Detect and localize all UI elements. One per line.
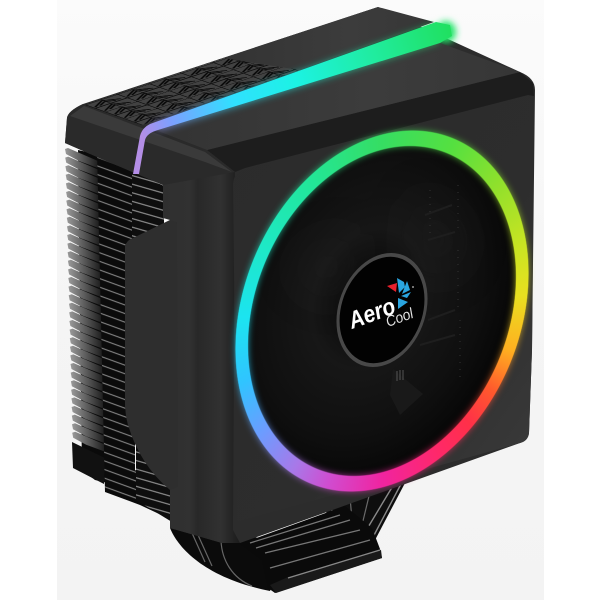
green light bar end glow — [436, 21, 456, 43]
fan frame details — [390, 185, 460, 415]
left top bevel — [65, 104, 235, 185]
front top panel — [150, 43, 520, 150]
rgb fan ring — [235, 130, 529, 492]
rgb bar glow — [150, 25, 440, 130]
heatsink fins: inner column — [97, 150, 172, 522]
heatsink fins: outer column — [65, 148, 108, 484]
side column — [163, 165, 240, 543]
logo text: Cool: Cool — [384, 305, 416, 331]
ventilation mesh — [85, 58, 300, 125]
side shroud panel — [125, 219, 178, 490]
cooler base plates — [240, 506, 382, 593]
rgb light bar — [133, 22, 452, 174]
curved heatpipes, left — [170, 528, 290, 591]
rear top panel — [223, 7, 434, 70]
fan blade shading — [290, 190, 470, 300]
shroud silhouette — [65, 7, 535, 543]
heatpipes, right — [326, 480, 405, 542]
fan ring glow — [230, 126, 534, 496]
hub disc — [338, 245, 426, 375]
fan opening — [247, 113, 517, 509]
logo icon — [387, 278, 414, 309]
top bevel band — [207, 72, 534, 172]
logo text: Aero: Aero — [344, 293, 399, 335]
fan panel front face — [233, 95, 534, 522]
